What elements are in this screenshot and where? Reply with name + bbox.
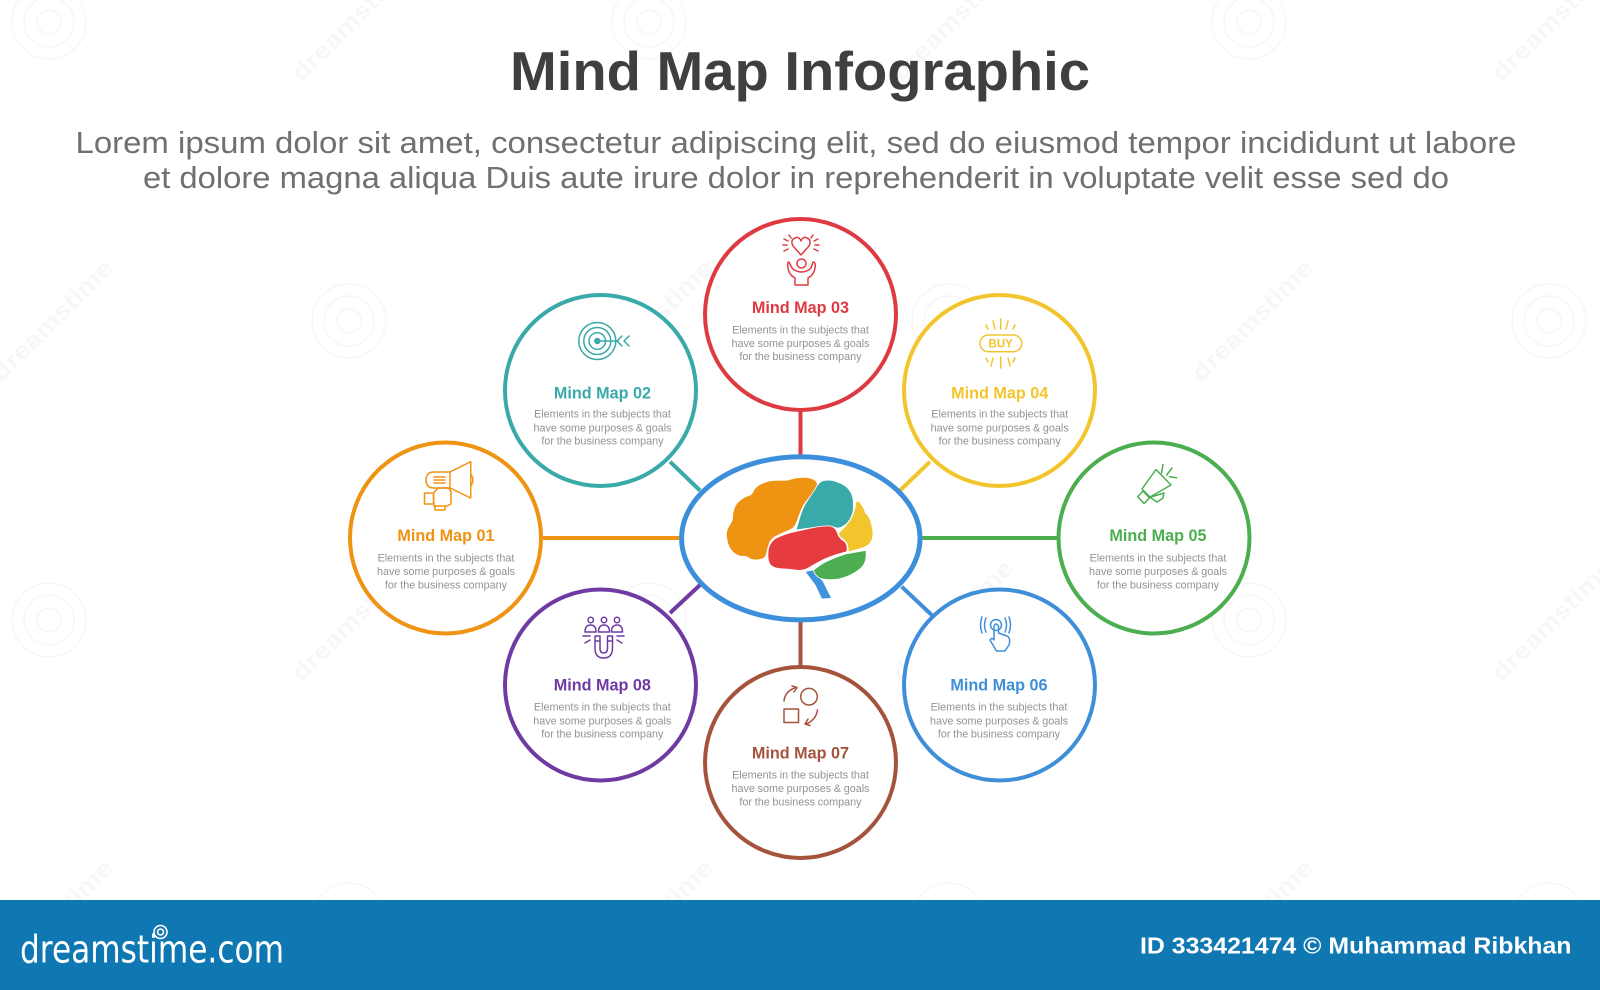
body text bbox=[731, 770, 870, 808]
icon: buy badge with rays: BUY bbox=[989, 338, 1013, 350]
icon: logo spiral bbox=[154, 926, 167, 938]
icon: target with arrow bbox=[579, 322, 629, 360]
body text: Elements in the subjects that bbox=[931, 702, 1067, 714]
body text bbox=[533, 409, 672, 448]
body text: for the business company bbox=[541, 729, 664, 741]
text: dreamstime bbox=[287, 555, 419, 687]
heading: Mind Map 03 bbox=[752, 299, 849, 317]
heading: Mind Map 06 bbox=[950, 677, 1048, 695]
body text: have some purposes & goals bbox=[533, 422, 672, 434]
panel: Mind Map 01 bbox=[350, 442, 541, 634]
body text: have some purposes & goals bbox=[731, 783, 870, 795]
text: dreamstime bbox=[1487, 555, 1600, 687]
panel: Mind Map 07 bbox=[705, 667, 896, 858]
body text bbox=[731, 324, 870, 363]
body text: for the business company bbox=[541, 436, 664, 448]
text: dreamstime bbox=[1187, 855, 1319, 987]
body text: for the business company bbox=[939, 436, 1061, 448]
body text: have some purposes & goals bbox=[533, 715, 672, 727]
body text: have some purposes & goals bbox=[377, 566, 516, 578]
body text: have some purposes & goals bbox=[1089, 566, 1228, 578]
body text: for the business company bbox=[385, 580, 508, 592]
heading: Mind Map 08 bbox=[554, 677, 651, 695]
heading: Mind Map 05 bbox=[1109, 527, 1207, 545]
text: dreamstime bbox=[587, 855, 719, 987]
body text: have some purposes & goals bbox=[931, 422, 1069, 434]
image credit: ID 333421474 © Muhammad Ribkhan bbox=[1140, 932, 1572, 958]
text: dreamstime bbox=[587, 255, 719, 387]
panel: Mind Map 08 bbox=[505, 590, 696, 780]
panel: Mind Map 03 bbox=[705, 219, 896, 410]
body text bbox=[930, 702, 1069, 741]
title: Mind Map Infographic bbox=[510, 40, 1090, 102]
central oval hub bbox=[682, 457, 920, 620]
icon: magnet attracting people bbox=[583, 617, 624, 658]
icon: multicolour brain bbox=[726, 477, 873, 599]
body text bbox=[931, 409, 1069, 448]
body text: Elements in the subjects that bbox=[534, 702, 671, 714]
heading: Mind Map 04 bbox=[951, 384, 1048, 402]
icon: shapes with cycle arrows bbox=[784, 686, 818, 726]
subtitle text block: et dolore magna aliqua Duis aute irure dolor in reprehenderit in voluptate velit esse sed do bbox=[143, 160, 1449, 195]
icon: person holding heart bbox=[783, 235, 819, 285]
panel: Mind Map 04 bbox=[904, 295, 1095, 486]
body text: Elements in the subjects that bbox=[732, 770, 869, 782]
body text: have some purposes & goals bbox=[731, 338, 870, 350]
logo wordmark: dreamstime.com bbox=[20, 928, 284, 972]
subtitle text block: Lorem ipsum dolor sit amet, consectetur adipiscing elit, sed do eiusmod tempor incididunt ut labore bbox=[76, 125, 1516, 160]
body text: Elements in the subjects that bbox=[378, 552, 514, 564]
footer bar bbox=[0, 900, 1600, 990]
heading: Mind Map 01 bbox=[397, 527, 495, 545]
icon: megaphone in hand bbox=[424, 462, 473, 510]
icon: angled megaphone bbox=[1138, 464, 1177, 504]
body text: for the business company bbox=[739, 796, 862, 808]
heading: Mind Map 07 bbox=[752, 744, 849, 762]
panel: Mind Map 05 bbox=[1058, 442, 1250, 634]
body text: for the business company bbox=[1097, 580, 1220, 592]
icon: buy badge with rays bbox=[980, 319, 1022, 368]
subtitle text block bbox=[76, 125, 1516, 195]
heading: Mind Map 02 bbox=[554, 384, 651, 402]
panel: Mind Map 06 bbox=[904, 590, 1095, 780]
body text: Elements in the subjects that bbox=[732, 324, 869, 336]
body text: Elements in the subjects that bbox=[534, 409, 671, 421]
body text bbox=[377, 552, 516, 592]
text: dreamstime bbox=[1187, 255, 1319, 387]
body text: have some purposes & goals bbox=[930, 715, 1069, 727]
body text: for the business company bbox=[739, 351, 862, 363]
connector lines bbox=[543, 410, 1058, 667]
panel: Mind Map 02 bbox=[505, 295, 696, 486]
body text: for the business company bbox=[938, 729, 1061, 741]
body text bbox=[1089, 552, 1228, 592]
icon: tap gesture bbox=[980, 617, 1010, 651]
body text: Elements in the subjects that bbox=[1090, 552, 1226, 564]
body text: Elements in the subjects that bbox=[931, 409, 1068, 421]
body text bbox=[533, 702, 672, 741]
text: dreamstime bbox=[887, 555, 1019, 687]
